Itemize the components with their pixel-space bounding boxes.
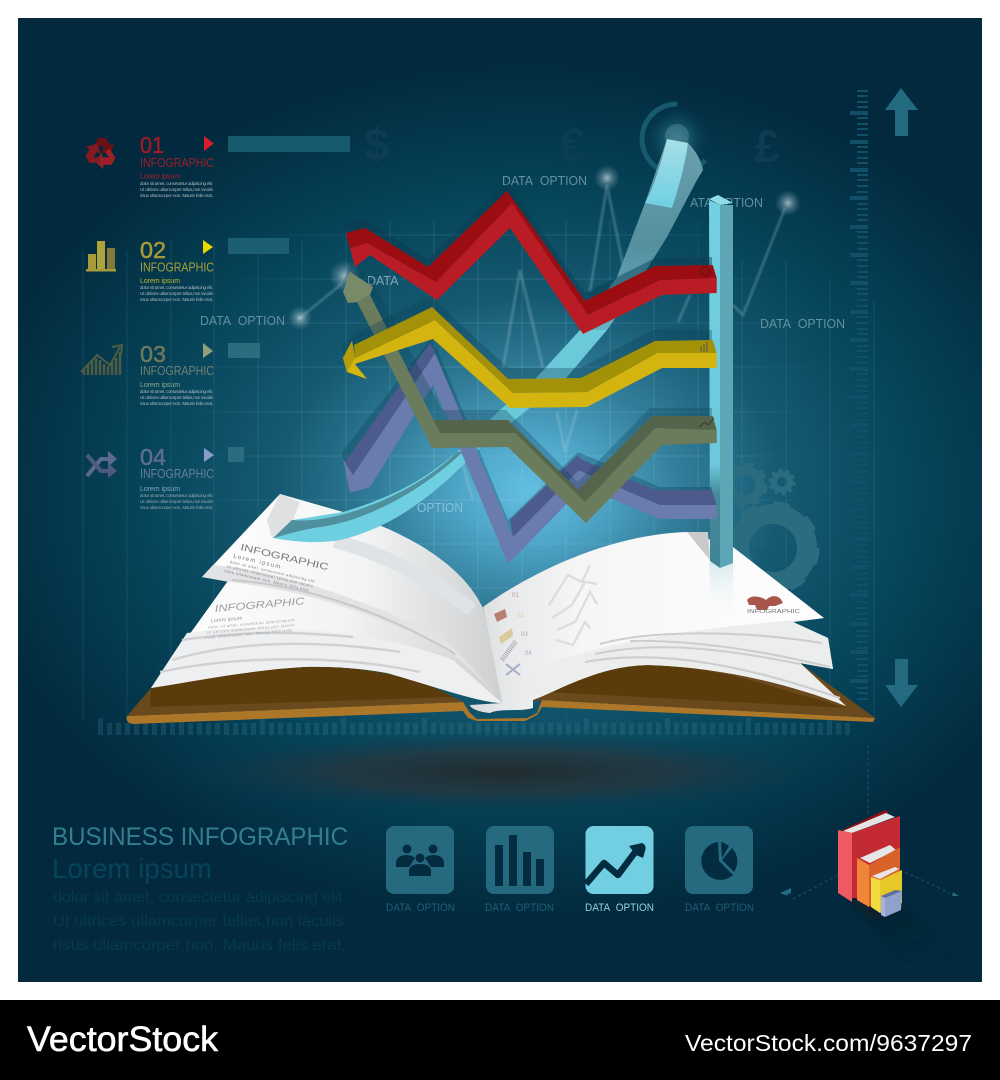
title block: dolor sit amet, consectetur adipiscing elit. (53, 889, 347, 906)
olive tab icon (699, 418, 714, 427)
currency symbols (364, 119, 780, 172)
background vertical stripes (83, 240, 874, 720)
legend item 03: risus ullamcorper non. Mauris felis erat, (140, 401, 213, 406)
legend item 04: INFOGRAPHIC (140, 467, 214, 481)
right page mini infographic: 03 (521, 632, 528, 638)
data option labels: ATA OPTION (690, 196, 763, 210)
data option labels: DATA OPTION (200, 314, 285, 328)
right page mini infographic: 04 (525, 651, 532, 657)
currency symbols: $ (364, 119, 390, 170)
legend item 01: risus ullamcorper non. Mauris felis erat, (140, 193, 213, 198)
option tile: bars: DATA OPTION (485, 902, 554, 914)
option tile: bars (485, 826, 554, 914)
olive arrow (343, 272, 717, 523)
legend item 02: 02 (140, 237, 166, 263)
option tile: people: DATA OPTION (386, 902, 455, 914)
legend item 03: 03 (140, 341, 166, 367)
option tile: growth (active): DATA OPTION (585, 902, 654, 914)
right page sketch lines (549, 565, 597, 645)
left upper leaf (202, 494, 502, 703)
red arrow (346, 191, 717, 334)
ruler scale right (850, 90, 868, 700)
legend item 02: dolor sit amet, consectetur adipiscing elit. (140, 285, 213, 290)
isometric axes (780, 745, 959, 899)
yellow book (871, 867, 902, 913)
red book (838, 810, 900, 902)
down arrow (885, 659, 918, 707)
icon: bar chart (86, 241, 116, 272)
orange book (857, 845, 900, 907)
left upper leaf caption: dolor sit amet, consectetur adipiscing elit. (230, 560, 316, 584)
legend item 02: Lorem ipsum (140, 276, 180, 285)
left upper leaf caption (223, 540, 330, 596)
legend item 03 (81, 341, 260, 406)
left upper leaf caption: risus ullamcorper non. Mauris felis erat, (223, 569, 310, 593)
legend item 04: 04 (140, 444, 166, 470)
legend item 04 (87, 444, 244, 510)
left lower leaf (151, 578, 502, 703)
red arrow shadow (343, 183, 712, 301)
right page stack (470, 532, 846, 713)
book cover (127, 663, 875, 724)
data option labels: DATA (367, 274, 399, 288)
currency symbols: € (559, 119, 585, 170)
option tile: pie (685, 826, 754, 914)
currency symbols: £ (754, 121, 780, 172)
legend item 03: INFOGRAPHIC (140, 364, 214, 378)
left lower leaf caption: Ut ultrices ullamcorper tellus,non iaculis (207, 623, 295, 635)
legend item 04: risus ullamcorper non. Mauris felis erat, (140, 505, 213, 510)
legend item 01 (82, 132, 350, 198)
olive arrow shadow (342, 264, 712, 502)
legend item 01: dolor sit amet, consectetur adipiscing elit. (140, 181, 213, 186)
icon: growth chart (81, 345, 122, 375)
legend item 03: Lorem ipsum (140, 380, 180, 389)
yellow tab icon (701, 342, 707, 352)
legend item 03: Ut ultrices ullamcorper tellus,non iaculis (140, 395, 214, 400)
footer band: VectorStock (27, 1020, 219, 1059)
up arrow (885, 88, 918, 136)
yellow arrow shadow (342, 296, 712, 379)
right page mini infographic (494, 593, 532, 675)
footer band (0, 1000, 1000, 1080)
data option labels: DATA OPTION (760, 317, 845, 331)
right page mini infographic: 01 (512, 593, 519, 599)
stacked books icon (838, 810, 955, 960)
icon: recycle (82, 138, 118, 172)
left lower leaf caption: INFOGRAPHIC (214, 596, 306, 615)
left lower leaf caption: dolor sit amet, consectetur adipiscing elit. (208, 618, 296, 630)
background line chart with glowing nodes (288, 165, 801, 500)
legend item 02: Ut ultrices ullamcorper tellus,non iaculis (140, 291, 214, 296)
title block: Ut ultrices ullamcorper tellus,non iaculis (53, 913, 344, 930)
legend item 01: INFOGRAPHIC (140, 156, 214, 170)
legend item 04: Ut ultrices ullamcorper tellus,non iaculis (140, 499, 214, 504)
title block: Lorem ipsum (52, 853, 212, 884)
red tab icon (700, 266, 710, 276)
right page caption (747, 596, 800, 615)
title block: risus ullamcorper non. Mauris felis erat, (53, 937, 346, 954)
option tile: people (386, 826, 455, 914)
left upper leaf caption: INFOGRAPHIC (239, 542, 330, 573)
vertical bar pillar (709, 195, 733, 625)
purple arrow shadow (342, 337, 712, 540)
left lower leaf caption: Lorem ipsum (211, 616, 243, 624)
title block (52, 823, 348, 954)
book ground shadow (165, 730, 845, 814)
gears (725, 465, 815, 590)
right page caption: INFOGRAPHIC (747, 609, 800, 615)
left upper leaf caption: Ut ultrices ullamcorper tellus,non iaculis (227, 565, 313, 588)
data option labels (200, 174, 845, 515)
legend item 02 (86, 237, 289, 302)
data option labels: OPTION (417, 501, 463, 515)
legend item 01: 01 (140, 132, 164, 158)
data option labels: DATA OPTION (502, 174, 587, 188)
left upper leaf caption: Lorem ipsum (233, 554, 281, 570)
left lower leaf caption: risus ullamcorper non. Mauris felis erat, (205, 628, 293, 640)
blue book (881, 890, 902, 917)
left lower leaf caption (202, 596, 308, 640)
legend item 04: Lorem ipsum (140, 484, 180, 493)
legend item 02: INFOGRAPHIC (140, 260, 214, 274)
target dial icon (642, 104, 710, 174)
purple arrow (343, 343, 717, 564)
legend item 02: risus ullamcorper non. Mauris felis erat, (140, 297, 213, 302)
open book (127, 494, 875, 724)
cyan rising arrow (273, 139, 703, 542)
legend item 03: dolor sit amet, consectetur adipiscing elit. (140, 389, 213, 394)
option tile: pie: DATA OPTION (685, 902, 754, 914)
legend item 01: Ut ultrices ullamcorper tellus,non iaculis (140, 187, 214, 192)
background grid (218, 220, 777, 712)
option tile: growth (active) (585, 826, 654, 914)
right page mini infographic: 02 (517, 613, 524, 619)
footer band: VectorStock.com/9637297 (685, 1030, 972, 1056)
books shadow (850, 900, 955, 960)
icon: shuffle (87, 451, 117, 478)
bottom tick strip (98, 718, 850, 735)
legend item 01: Lorem ipsum (140, 172, 180, 180)
yellow arrow (343, 307, 717, 408)
title block: BUSINESS INFOGRAPHIC (52, 823, 348, 851)
legend item 04: dolor sit amet, consectetur adipiscing elit. (140, 493, 213, 498)
